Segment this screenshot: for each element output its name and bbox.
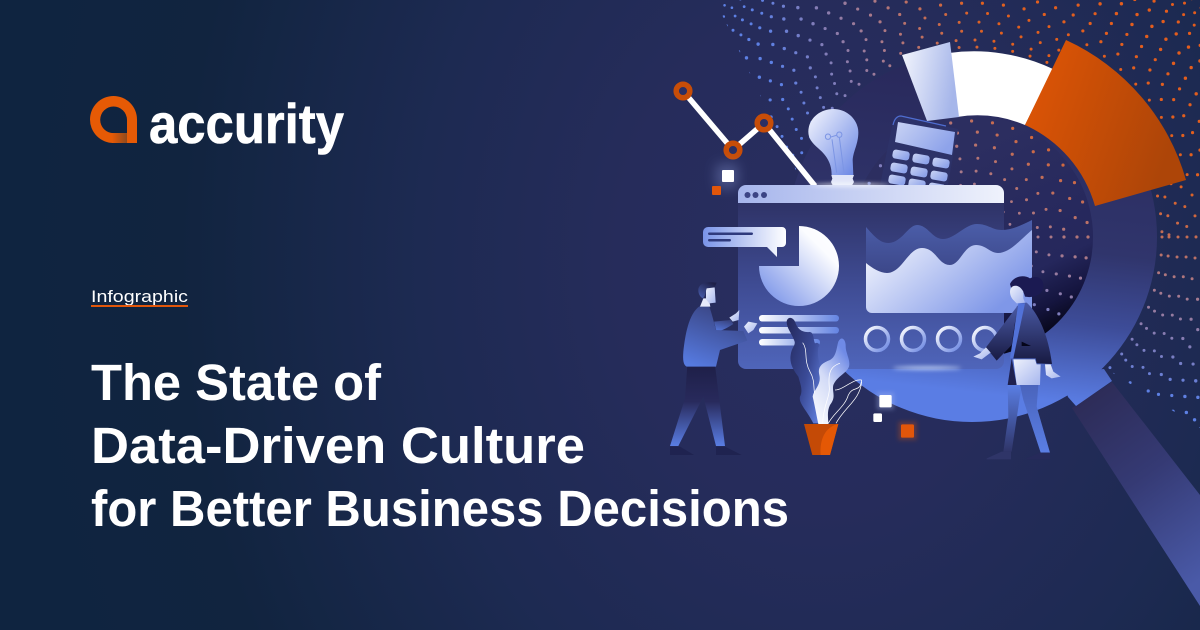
title: Data-Driven Culture — [91, 417, 585, 474]
pie chart — [759, 226, 839, 306]
logo — [90, 92, 344, 155]
ring chart — [787, 40, 1186, 422]
logo wordmark: accurity — [149, 92, 344, 155]
glow under window — [893, 366, 961, 370]
glow on top of window — [810, 184, 890, 186]
icon: light bulb — [808, 109, 858, 185]
back wave — [866, 220, 1032, 300]
face — [706, 287, 716, 303]
torso — [683, 306, 747, 367]
floating squares lower — [873, 392, 917, 440]
window buttons — [744, 192, 767, 198]
title: The State of — [91, 354, 382, 411]
blouse — [1010, 303, 1025, 358]
white segment — [949, 51, 1053, 125]
icon: calculator — [888, 115, 958, 185]
shoes — [987, 452, 1011, 459]
far hand — [729, 310, 739, 322]
back leg — [1003, 385, 1022, 452]
orange segment — [1025, 40, 1186, 206]
title: for Better Business Decisions — [91, 480, 789, 537]
beam behind ring — [1072, 382, 1200, 606]
floating squares upper — [712, 164, 738, 195]
speech bubble — [703, 227, 786, 257]
eyebrow label: Infographic — [91, 287, 189, 306]
ring notch — [1060, 369, 1112, 406]
window title bar — [738, 185, 1004, 203]
front leg — [1020, 385, 1050, 453]
progress rings — [866, 328, 996, 350]
line chart — [676, 84, 815, 186]
hair — [698, 282, 717, 298]
woman figure — [973, 276, 1061, 459]
light leaf — [813, 339, 849, 424]
jacket left arm — [986, 306, 1017, 361]
leaf veins — [803, 343, 862, 423]
pale segment — [902, 42, 959, 121]
dot field — [722, 0, 1200, 428]
window body — [738, 203, 1004, 369]
list lines — [759, 315, 839, 346]
dark leaf — [787, 318, 825, 423]
ring band — [787, 52, 1157, 422]
pocket — [1022, 342, 1031, 346]
front area chart — [866, 230, 1032, 313]
man figure — [670, 282, 757, 455]
skirt — [1013, 359, 1041, 385]
legs — [670, 365, 725, 446]
near hand — [744, 322, 757, 333]
shoes — [670, 447, 694, 455]
jacket body — [1012, 303, 1052, 364]
hair — [1010, 276, 1043, 297]
skirt dark side — [1008, 358, 1017, 385]
face — [1010, 286, 1025, 303]
logo mark — [90, 96, 137, 143]
plant — [787, 318, 862, 455]
neck — [700, 298, 710, 307]
title — [91, 354, 789, 537]
hands — [973, 347, 991, 359]
plant pot — [804, 424, 838, 455]
ring hole — [849, 114, 1095, 360]
far arm — [714, 320, 733, 332]
dashboard window — [703, 184, 1032, 370]
